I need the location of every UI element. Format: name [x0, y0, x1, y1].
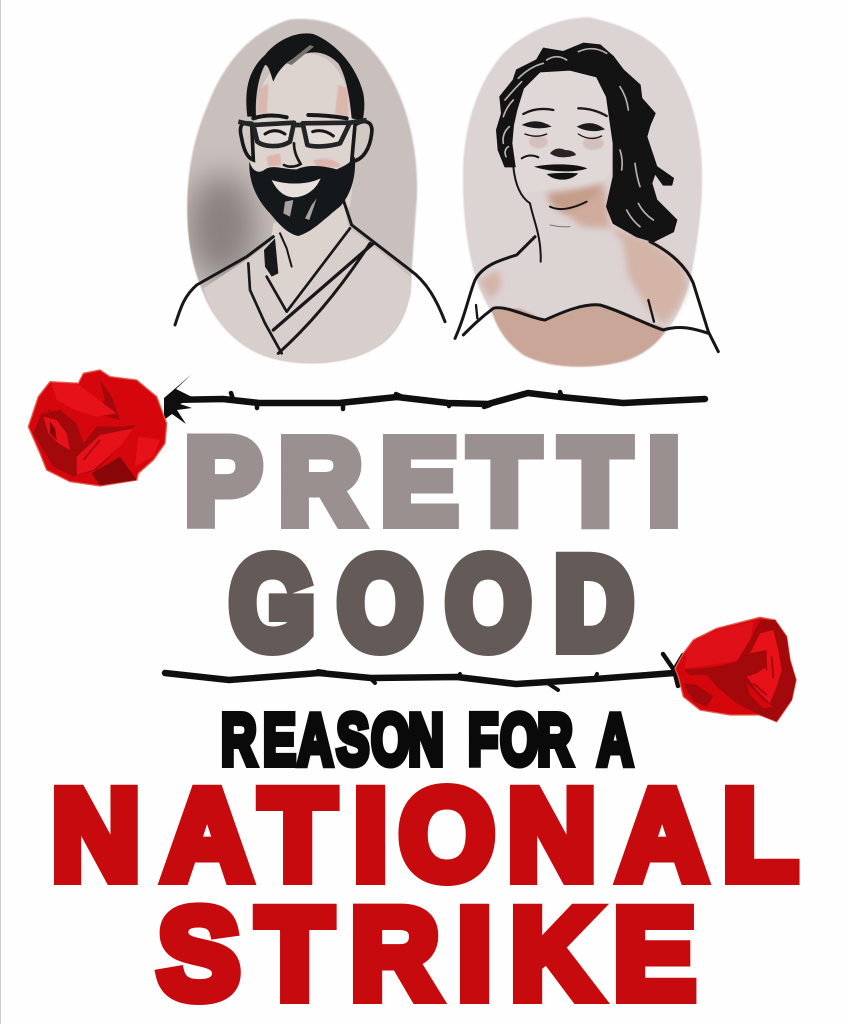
man: neck: [267, 200, 348, 312]
man: grey wash shading: [187, 173, 257, 280]
man: cheek tones: [257, 83, 348, 168]
lower sepals: [663, 654, 683, 686]
man: watercolor oval: [187, 19, 417, 363]
man: hair highlight: [287, 45, 314, 65]
man: shirt: [203, 227, 410, 363]
rose: lower right with stem: [165, 617, 796, 722]
woman: nose: [550, 149, 576, 157]
rose: upper left with stem: [28, 370, 705, 486]
woman: hair: [497, 43, 677, 242]
portrait: woman with dark curly hair: [455, 17, 718, 367]
man: collar shadow: [264, 238, 278, 277]
man: hair: [246, 33, 364, 121]
woman: face and body lines: [455, 134, 718, 352]
man: beard highlights: [283, 198, 317, 220]
man: smile: [272, 178, 321, 197]
heading: STRIKE: STRIKE: [158, 882, 695, 1024]
woman: shoulder wash: [478, 227, 688, 325]
heading: GOOD: GOOD: [230, 533, 633, 676]
man: glasses: [238, 120, 367, 146]
woman: under-eye tone: [529, 135, 604, 150]
portrait: man with glasses and beard: [175, 19, 445, 363]
heading: REASON FOR A: REASON FOR A: [221, 700, 633, 781]
woman: brows: [523, 108, 607, 116]
woman: hair highlights: [503, 49, 653, 227]
upper sepals: [164, 374, 196, 424]
woman: mouth: [534, 164, 587, 180]
man: beard: [249, 157, 355, 236]
upper rose head: [28, 370, 167, 486]
woman: face: [512, 69, 613, 193]
woman: eyes: [522, 121, 605, 131]
heading: PRETTI: PRETTI: [185, 414, 680, 550]
man: eyes and brows: [253, 115, 347, 136]
upper stem: [168, 392, 705, 409]
woman: dress wash: [492, 303, 667, 367]
man: nose: [284, 143, 301, 167]
lower stem: [165, 671, 674, 690]
woman: watercolor oval: [463, 17, 702, 366]
man: face: [250, 53, 355, 233]
heading: NATIONAL: NATIONAL: [51, 763, 798, 907]
man: neck and shirt lines: [175, 200, 445, 353]
woman: chin shade: [547, 183, 604, 212]
lower rose head: [675, 617, 796, 722]
man: ears: [240, 122, 372, 162]
woman: chin and neck shadow: [550, 187, 610, 228]
